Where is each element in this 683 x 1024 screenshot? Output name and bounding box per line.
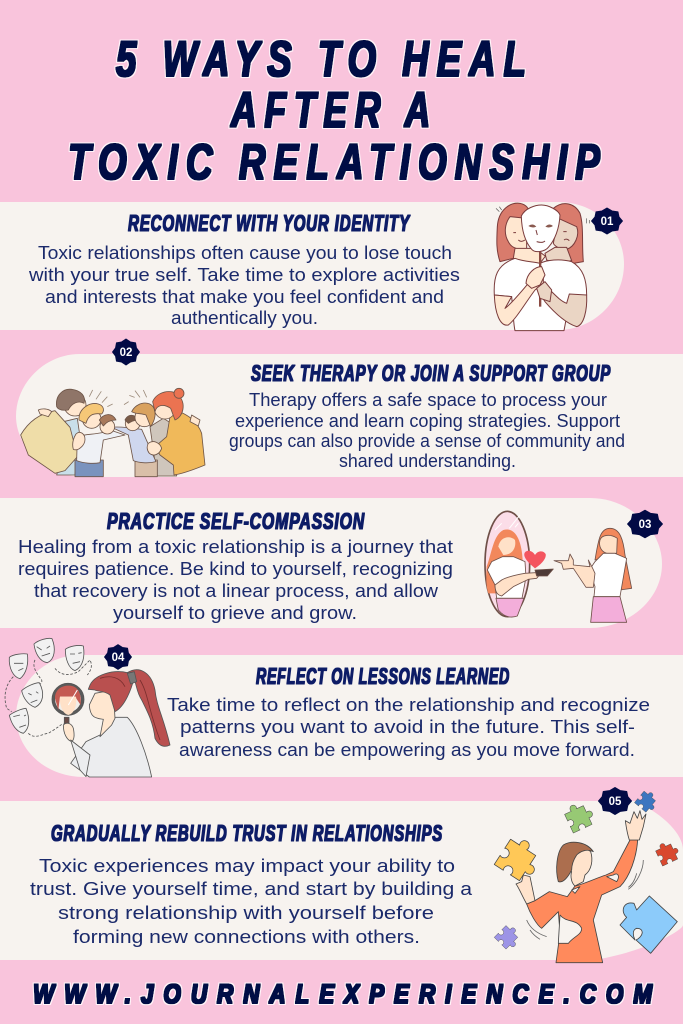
panel: reconnect with your identity xyxy=(0,202,624,331)
body text: with your true self. Take time to explore activities xyxy=(28,264,460,285)
panel background xyxy=(16,354,683,477)
heading: PRACTICE SELF-COMPASSION xyxy=(107,508,365,534)
body text xyxy=(167,694,650,760)
heading: REFLECT ON LESSONS LEARNED xyxy=(256,663,510,689)
body text: Therapy offers a safe space to process your xyxy=(249,389,607,410)
body text: strong relationship with yourself before xyxy=(58,902,434,923)
badge 04: 04 xyxy=(112,652,125,664)
body text xyxy=(30,855,473,947)
body text xyxy=(18,536,453,623)
badge 03: 03 xyxy=(639,519,651,531)
badge 01: 01 xyxy=(601,216,614,228)
icon: woman looking in hand mirror with masks xyxy=(5,638,170,777)
icon: woman juggling puzzle pieces xyxy=(494,788,681,963)
title: AFTER A xyxy=(230,82,438,138)
body text: Toxic experiences may impact your ability to xyxy=(39,855,455,876)
badge 04 xyxy=(104,645,132,669)
body text xyxy=(28,242,460,328)
icon: group of friends huddling xyxy=(21,388,205,477)
heading: GRADUALLY REBUILD TRUST IN RELATIONSHIPS xyxy=(51,820,443,846)
body text: experience and learn coping strategies. Support xyxy=(235,410,620,431)
panel: reflect on lessons learned xyxy=(5,638,683,777)
badge 01 xyxy=(592,208,622,234)
badge 05: 05 xyxy=(609,796,622,808)
panel background xyxy=(16,655,683,777)
body text: awareness can be empowering as you move forward. xyxy=(179,739,635,760)
body text: requires patience. Be kind to yourself, recognizing xyxy=(18,558,453,579)
badge 02: 02 xyxy=(120,347,132,359)
badge 02 xyxy=(112,339,140,365)
heading: RECONNECT WITH YOUR IDENTITY xyxy=(128,210,411,236)
icon: woman and mirror with heart xyxy=(485,511,632,622)
body text: Toxic relationships often cause you to lose touch xyxy=(38,242,452,263)
body text: yourself to grieve and grow. xyxy=(113,602,357,623)
body text: shared understanding. xyxy=(339,450,516,471)
panel: gradually rebuild trust in relationships xyxy=(0,788,683,963)
body text: authentically you. xyxy=(171,307,318,328)
badge 03 xyxy=(628,510,662,538)
body text: Healing from a toxic relationship is a journey that xyxy=(18,536,453,557)
body text: trust. Give yourself time, and start by building a xyxy=(30,878,473,899)
body text: and interests that make you feel confident and xyxy=(45,286,444,307)
panel: seek therapy or join a support group xyxy=(16,339,683,477)
panel background xyxy=(0,202,624,330)
panel background xyxy=(0,498,662,628)
body text: that recovery is not a linear process, and allow xyxy=(34,580,439,601)
badge 05 xyxy=(598,788,632,814)
body text: forming new connections with others. xyxy=(73,926,420,947)
panel: practice self-compassion xyxy=(0,498,662,628)
body text: groups can also provide a sense of community and xyxy=(229,430,625,451)
title: 5 WAYS TO HEAL xyxy=(116,31,534,87)
panel background xyxy=(0,801,683,960)
title xyxy=(68,31,608,190)
body text: Take time to reflect on the relationship and recognize xyxy=(167,694,650,715)
body text xyxy=(229,389,625,471)
icon: woman holding mask xyxy=(494,203,589,331)
body text: patterns you want to avoid in the future. This self- xyxy=(180,716,635,737)
